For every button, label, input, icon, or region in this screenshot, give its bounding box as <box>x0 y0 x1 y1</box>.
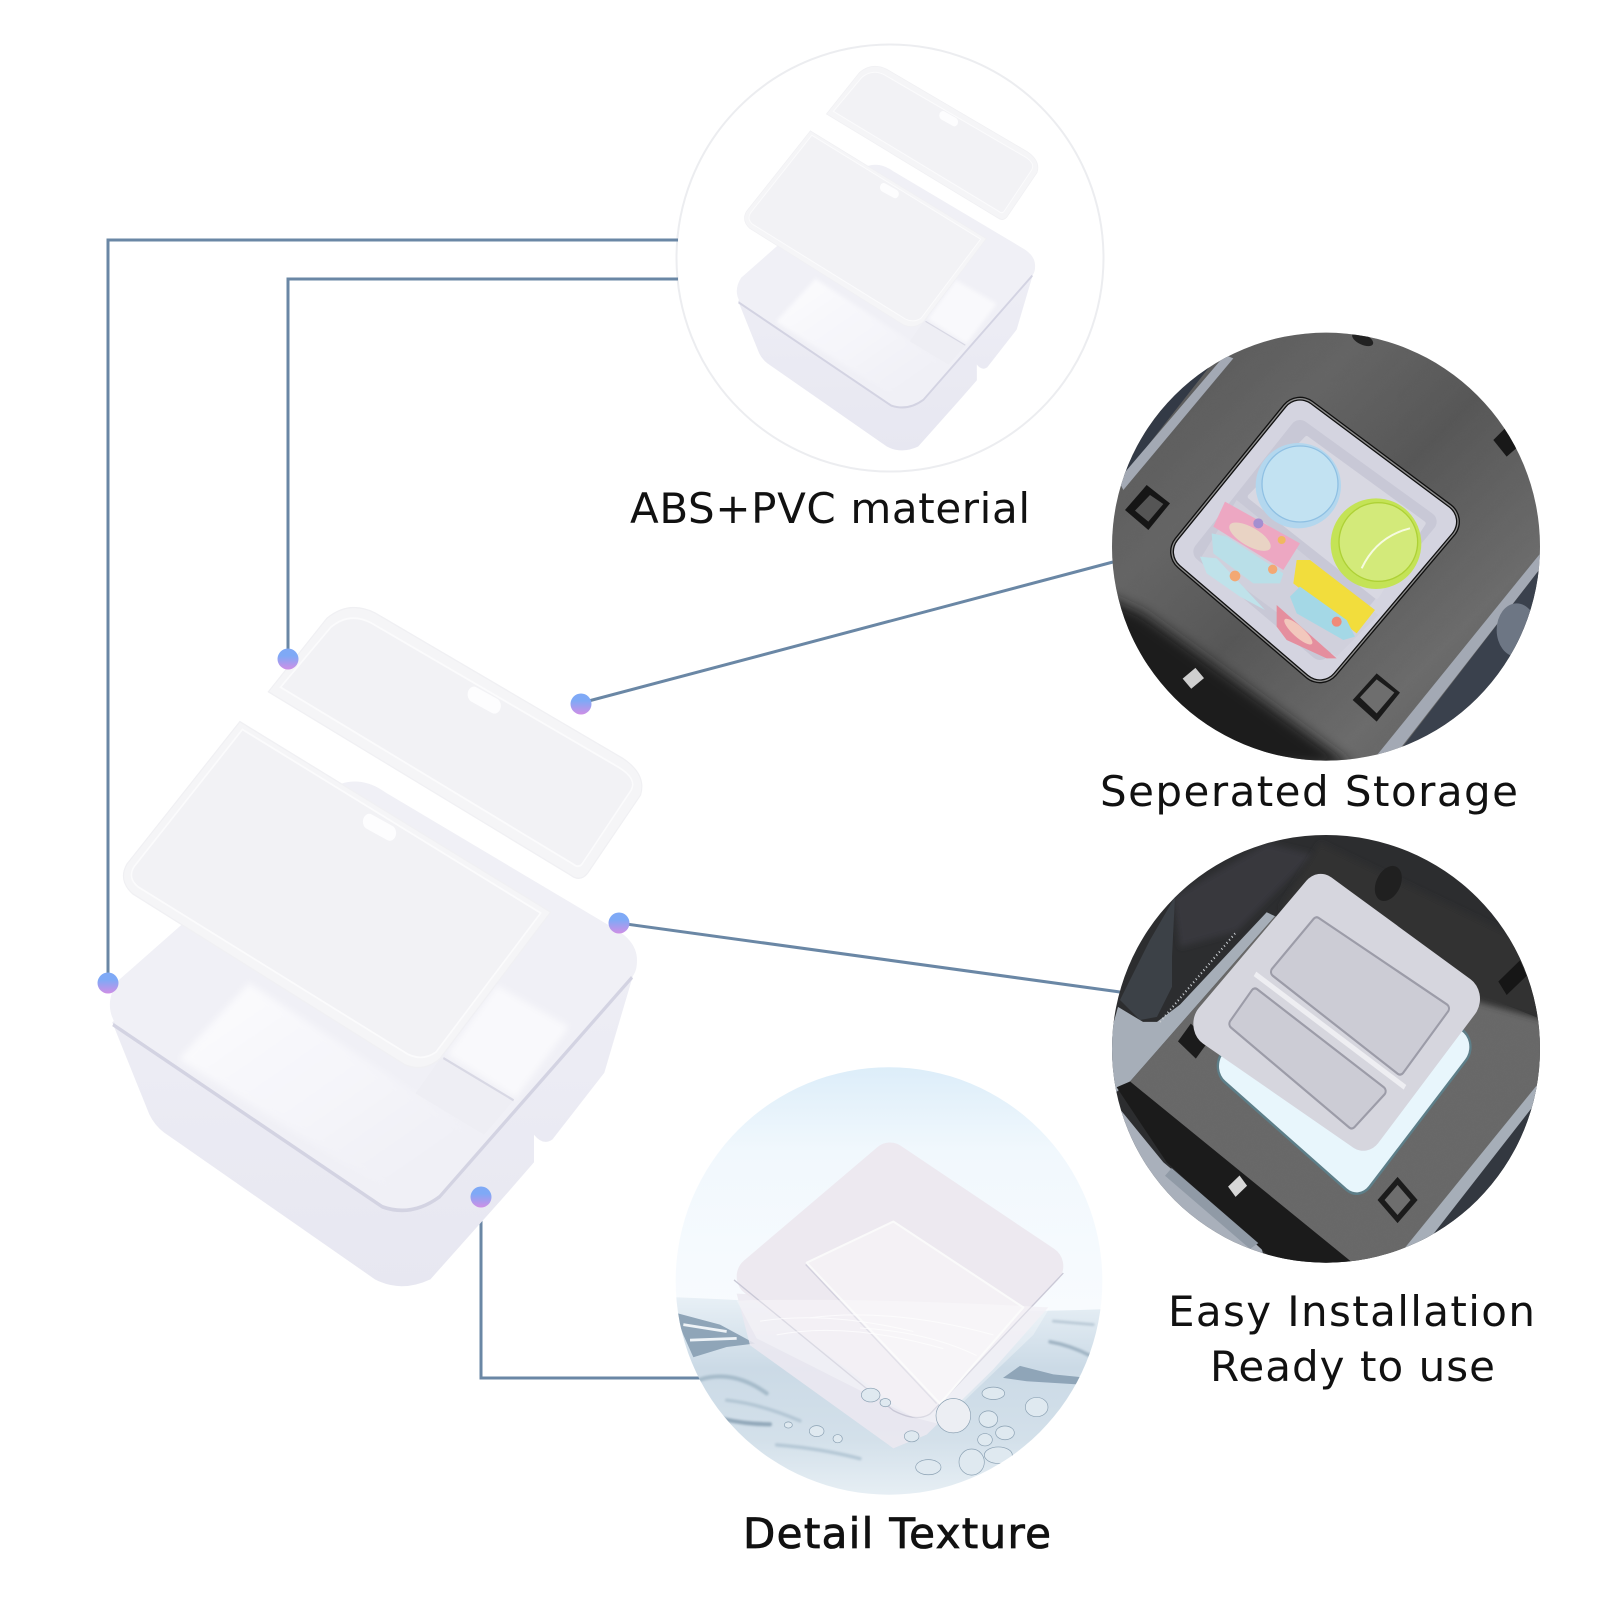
right notch <box>1494 428 1516 456</box>
panel: separated storage photo <box>1107 330 1543 767</box>
water droplets <box>784 1387 1048 1475</box>
tray wall under water <box>737 1294 1048 1448</box>
box body <box>112 830 637 1286</box>
callout dots <box>98 648 630 1208</box>
lower-right trim <box>1372 552 1542 762</box>
lower-right trim <box>1405 1085 1537 1248</box>
perforated seat cushion <box>1120 897 1175 1020</box>
floating tray <box>1213 897 1460 1128</box>
divider <box>416 1057 514 1135</box>
leader line: installation to box corner <box>619 923 1120 992</box>
label: Ready to use: Ready to use <box>1210 1342 1495 1391</box>
latch <box>1228 1175 1247 1197</box>
leader line: material to outer box <box>108 240 678 984</box>
front rim edge <box>113 977 632 1210</box>
inset button <box>1165 1168 1258 1249</box>
upper console dark band <box>1314 860 1538 1022</box>
top notch <box>1352 334 1374 346</box>
label: ABS+PVC material: ABS+PVC material <box>630 484 1030 533</box>
circle outline <box>676 44 1104 472</box>
label: Easy Installation: Easy Installation <box>1168 1287 1535 1336</box>
right compartment highlight <box>447 986 569 1098</box>
upper seat sheen <box>1173 843 1313 947</box>
green lid <box>1331 498 1421 589</box>
panel: easy installation photo <box>1110 832 1543 1266</box>
water <box>673 1297 1107 1500</box>
label: Detail Texture: Detail Texture <box>743 1509 1051 1558</box>
icon: miniature storage box <box>737 66 1038 450</box>
label: Seperated Storage: Seperated Storage <box>1100 767 1518 816</box>
water surface overlay <box>737 1300 1050 1424</box>
left square button <box>1178 1024 1206 1058</box>
surface ripples <box>760 1315 993 1356</box>
box rim <box>110 782 637 1211</box>
divider bar <box>1255 974 1405 1087</box>
right square button <box>1378 1177 1418 1223</box>
perforated strip <box>1160 932 1237 1022</box>
lower-right seat <box>1403 570 1539 746</box>
inner compartment <box>807 1222 1023 1404</box>
leader line: material to lid <box>288 279 678 658</box>
lower-left dark edge <box>1107 597 1353 767</box>
snacks <box>1200 502 1375 658</box>
surface noise <box>1130 916 1543 1266</box>
surface noise <box>1110 330 1543 763</box>
dark ripple patches <box>675 1313 1088 1385</box>
seat cushion highlight <box>1496 603 1530 656</box>
main product: storage box with two lids <box>110 608 642 1286</box>
lower-left silver panel <box>1121 1110 1263 1253</box>
latch <box>1183 668 1204 689</box>
upper compartment <box>1275 922 1445 1070</box>
dark backdrop <box>1110 832 1543 1266</box>
box floor highlight <box>179 983 482 1194</box>
panel: ABS+PVC material circle <box>676 44 1104 472</box>
upper-left seat <box>1124 367 1210 476</box>
sky backdrop <box>673 1065 1107 1313</box>
light lower-left trim <box>1110 912 1275 1097</box>
divider <box>806 1264 937 1404</box>
soft ripples <box>700 1321 1093 1459</box>
leader line: texture to box <box>481 1196 702 1378</box>
lower compartment <box>1246 510 1322 636</box>
console surface <box>1130 916 1543 1266</box>
blue lid <box>1256 443 1341 528</box>
black trim under console <box>1117 1082 1357 1266</box>
front lid <box>123 722 551 1068</box>
glowing cavity <box>1235 962 1453 1174</box>
panel: detail texture photo <box>673 1065 1107 1500</box>
back lid <box>268 608 642 878</box>
lower-right seat <box>1420 1096 1535 1242</box>
top notch <box>1375 866 1402 901</box>
divider edge <box>443 1058 514 1100</box>
right square button <box>1353 673 1400 722</box>
lower compartment <box>1233 993 1382 1124</box>
tray front edge <box>734 1273 1063 1418</box>
console surface <box>1110 330 1543 763</box>
tray <box>1192 418 1438 662</box>
upper-left trim <box>1118 355 1233 490</box>
upper compartment pad <box>1250 438 1423 597</box>
left square button <box>1125 485 1170 530</box>
leader line: storage to lid <box>581 562 1113 703</box>
right notch <box>1498 960 1527 995</box>
submerged tray <box>734 1163 1063 1418</box>
